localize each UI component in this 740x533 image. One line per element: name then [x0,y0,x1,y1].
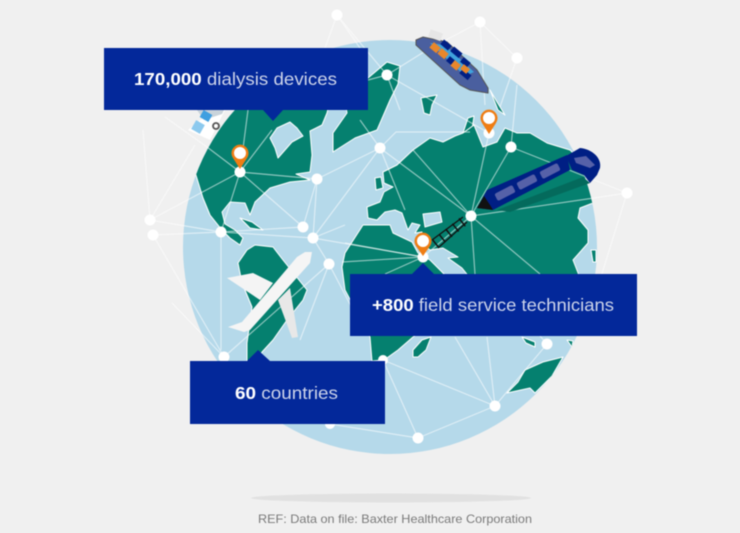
callout: 60 countries [190,350,385,424]
infographic [103,10,638,526]
North America [195,100,330,245]
Caribbean islands [240,218,263,230]
continents [195,62,596,393]
icon: location pin North America [232,145,248,169]
icon: vehicle [188,108,225,140]
icon: cargo ship [416,29,488,93]
globe shadow [251,494,531,502]
network lines [143,15,627,438]
Southeast Asia islands [522,250,596,347]
Iceland [421,95,437,115]
globe ocean [183,40,597,454]
Australia [507,357,563,393]
Arctic islands [463,90,505,133]
callout: 170,000 dialysis devices: 170,000 dialysis devices [134,69,337,89]
Greenland [333,62,400,152]
icon: airplane [227,252,312,338]
icon: location pin Europe [414,233,432,256]
UK [375,177,383,190]
reference note: REF: Data on file: Baxter Healthcare Corporation [258,512,532,526]
Eurasia [367,125,593,278]
Black Sea [423,212,442,227]
callout: +800 field service technicians: +800 field service technicians [372,295,614,315]
callout: 60 countries: 60 countries [235,383,338,403]
icon: location pin Russia [480,110,498,134]
callout: +800 field service technicians [350,263,637,336]
network nodes [144,10,632,444]
Africa [342,225,458,361]
South America [238,245,307,365]
callout: 170,000 dialysis devices [104,48,368,121]
Madagascar [413,337,431,357]
icon: train with track [432,148,600,248]
Hudson Bay [270,122,303,158]
